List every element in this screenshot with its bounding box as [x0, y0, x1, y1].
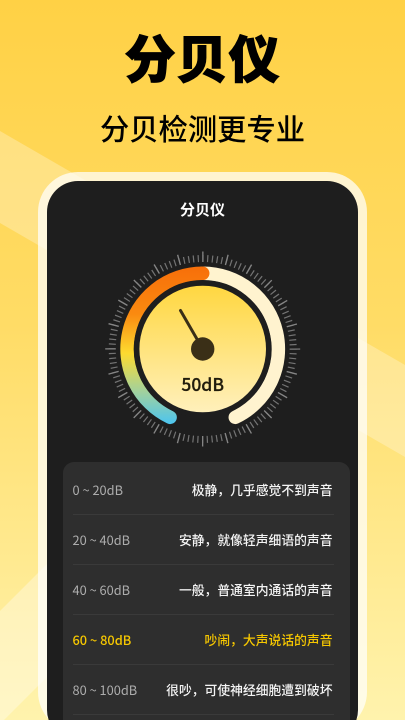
title: 分贝仪: [124, 32, 280, 89]
row: 60-80dB highlighted: 吵闹，大声说话的声音: [205, 630, 332, 649]
dark ring: [134, 280, 272, 418]
gauge face: [139, 286, 266, 412]
row: 0-20dB: [72, 480, 332, 499]
phone screen: [47, 181, 358, 720]
colored level arc: [127, 273, 203, 417]
row: 20-40dB: 安静，就像轻声细语的声音: [179, 530, 332, 549]
cream arc: [203, 273, 278, 417]
phone frame: [38, 172, 367, 720]
row: 60-80dB highlighted: 60 ~ 80dB: [72, 630, 131, 649]
panel: decibel levels: [63, 462, 350, 720]
row: 40-60dB: 一般，普通室内通话的声音: [179, 580, 332, 599]
needle: [180, 310, 214, 361]
long ticks: [110, 257, 295, 441]
row: 40-60dB: 40 ~ 60dB: [72, 580, 130, 599]
row: 40-60dB: [72, 580, 332, 599]
row: 80-100dB: 80 ~ 100dB: [72, 680, 137, 699]
row: 20-40dB: [72, 530, 332, 549]
row: 80-100dB: 很吵，可使神经细胞遭到破坏: [166, 680, 332, 699]
screen heading: 分贝仪: [180, 202, 225, 219]
gauge reading: 50dB: [181, 372, 224, 397]
row: 60-80dB highlighted: [72, 630, 332, 649]
row: 80-100dB: [72, 680, 332, 699]
row: 0-20dB: 极静，几乎感觉不到声音: [192, 480, 332, 499]
subtitle: 分贝检测更专业: [100, 114, 305, 146]
row: 20-40dB: 20 ~ 40dB: [72, 530, 130, 549]
row: 0-20dB: 0 ~ 20dB: [72, 480, 123, 499]
short ticks: [112, 258, 293, 440]
